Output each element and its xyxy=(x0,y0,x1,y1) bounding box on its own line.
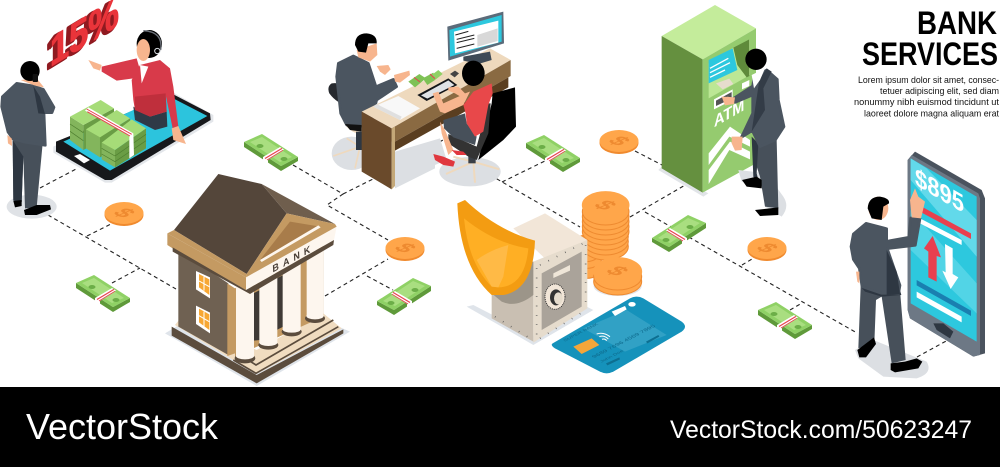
ATM machine: ATM xyxy=(714,95,744,131)
entablature xyxy=(167,233,246,290)
keyboard and mouse xyxy=(417,71,459,101)
mobile banking scene: consultant on phone with money xyxy=(53,30,213,183)
teller desk scene xyxy=(328,12,516,189)
credit card: 9689 7696 4569 7895 xyxy=(591,324,658,359)
description text: tetuer adipiscing elit, sed diam xyxy=(880,86,999,96)
money pack: lower right xyxy=(758,302,812,339)
security group: coins, safe, shield, card: $ xyxy=(599,263,635,278)
teller woman xyxy=(433,61,493,167)
coin: left xyxy=(104,202,144,226)
coin: right xyxy=(748,237,786,261)
watermark bar: VectorStock xyxy=(26,406,219,447)
coin: centre top: $ xyxy=(602,133,638,148)
dashed connector lines xyxy=(40,140,948,357)
money stacks xyxy=(70,100,146,167)
ATM machine xyxy=(658,5,786,217)
bank windows xyxy=(196,271,210,333)
coin stacks xyxy=(572,192,642,296)
roof xyxy=(174,174,287,274)
security group: coins, safe, shield, card xyxy=(457,192,685,373)
man on phone xyxy=(2,61,57,219)
watermark bar xyxy=(0,387,1000,467)
customer chair xyxy=(328,83,362,168)
description text: laoreet dolore magna aliquam erat xyxy=(864,108,999,118)
money pack: lower centre xyxy=(377,278,431,315)
coin: centre left: $ xyxy=(388,240,424,255)
coin: centre top xyxy=(600,130,638,154)
large phone: $895 xyxy=(915,163,964,219)
credit card xyxy=(552,297,685,373)
desk xyxy=(362,48,511,189)
coin: left: $ xyxy=(107,205,143,220)
customer xyxy=(851,188,929,378)
customer man xyxy=(337,33,410,132)
money pack: centre xyxy=(526,135,580,172)
ATM customer xyxy=(722,49,786,217)
security group: coins, safe, shield, card: $ xyxy=(587,198,623,213)
title xyxy=(862,5,998,72)
credit card: John Doe xyxy=(599,349,625,364)
large phone xyxy=(908,152,985,357)
desk cash xyxy=(408,70,443,87)
bank building xyxy=(165,174,350,386)
money pack: right xyxy=(652,215,706,252)
smartphone with customer xyxy=(851,152,985,378)
description text xyxy=(854,75,999,118)
description text: nonummy nibh euismod tincidunt ut xyxy=(854,97,999,107)
coin: right: $ xyxy=(750,240,786,255)
bank sign: BANK xyxy=(272,242,315,276)
shield xyxy=(457,200,535,295)
teller chair xyxy=(446,87,516,183)
credit card: SUPER BANK xyxy=(562,322,601,343)
coin: centre left xyxy=(386,237,424,261)
money pack: lower left xyxy=(76,275,130,312)
watermark bar: VectorStock.com/50623247 xyxy=(670,416,972,444)
consultant woman xyxy=(88,30,186,144)
pediment xyxy=(246,213,337,277)
monitor xyxy=(447,12,504,64)
safe xyxy=(467,213,593,345)
columns xyxy=(235,250,325,363)
money pack: top centre xyxy=(244,134,298,171)
